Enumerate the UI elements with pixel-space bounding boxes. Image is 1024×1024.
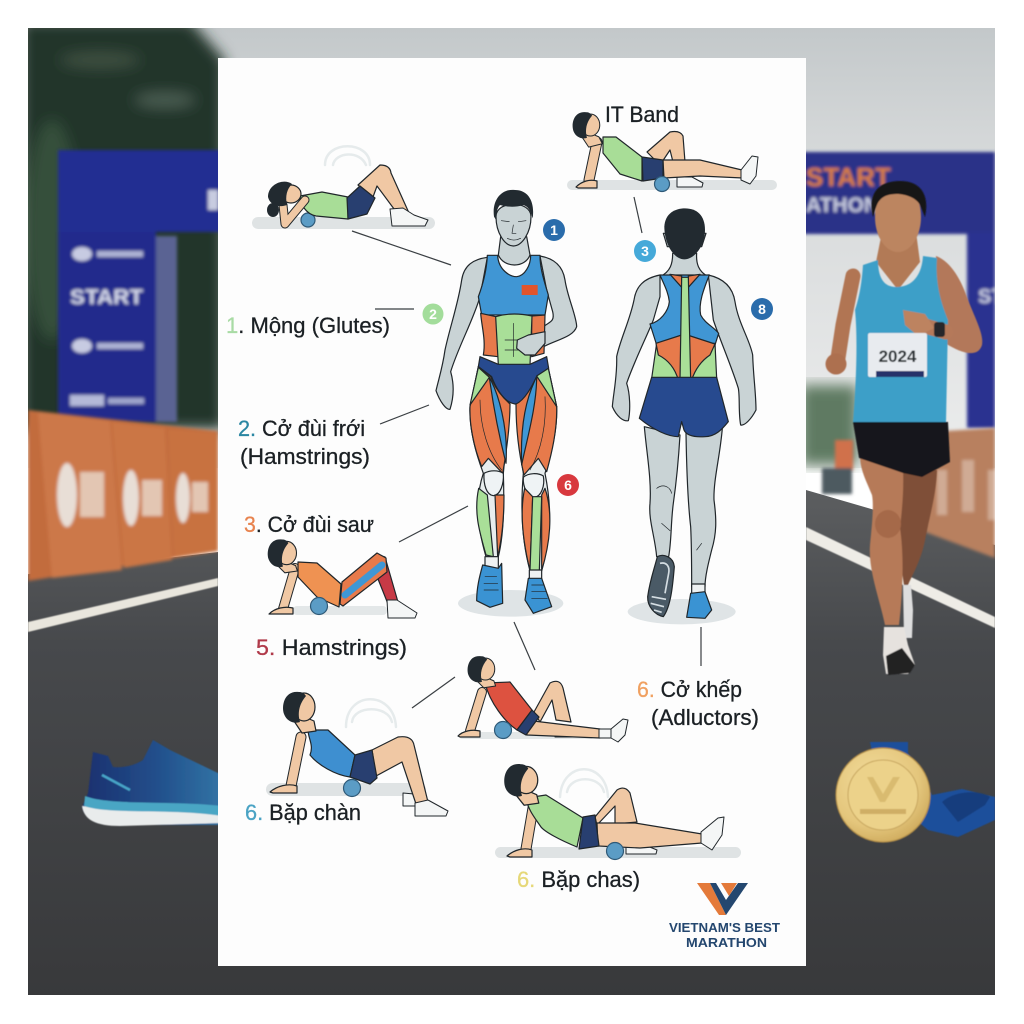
flat shoe <box>677 177 703 187</box>
back body figure <box>612 208 756 624</box>
green top <box>300 192 348 219</box>
right orange barrier <box>925 428 995 558</box>
medal disc <box>836 748 930 842</box>
shoe on road <box>82 740 222 826</box>
runner front leg <box>860 455 915 675</box>
blurred crowd <box>822 440 853 494</box>
badge 3 <box>634 240 656 262</box>
runner hand <box>903 310 946 337</box>
label: 6 adductors <box>637 677 759 730</box>
shoes <box>387 600 417 618</box>
right start arch: START <box>806 162 891 192</box>
leg base silhouettes <box>470 367 557 571</box>
exercise 6: green top leg extended <box>495 764 741 860</box>
left orange barrier <box>28 410 218 581</box>
roller <box>310 598 328 614</box>
logo text: MARATHON <box>686 936 767 950</box>
back muscles <box>652 274 717 380</box>
arm <box>269 568 295 614</box>
arm <box>576 142 597 188</box>
runner left arm <box>826 276 853 374</box>
left thigh <box>470 367 510 473</box>
exercise 3: hamstrings, orange top <box>268 539 417 618</box>
label: 2 Hamstrings: 2. Cở đùi frới <box>238 416 365 441</box>
bent leg <box>534 681 571 722</box>
label: 5 Hamstrings: 5. Hamstrings) <box>256 635 407 660</box>
neck and head <box>494 190 533 265</box>
arm <box>270 737 301 793</box>
briefs <box>478 357 549 404</box>
badge 3: 3 <box>641 243 649 259</box>
straight leg <box>525 720 600 738</box>
badge 8: 8 <box>758 301 766 317</box>
red shin <box>376 555 398 604</box>
motion arcs <box>325 146 370 165</box>
shorts <box>642 157 663 181</box>
blue top <box>308 730 355 777</box>
badge 6 <box>557 474 579 496</box>
label: 6 adductors: (Adluctors) <box>651 705 759 730</box>
label: 6 Bap chan: 6. Bặp chàn <box>245 800 361 825</box>
trees left <box>20 20 225 430</box>
runner back leg <box>898 470 937 638</box>
mat <box>293 606 387 615</box>
label: 2 Hamstrings <box>238 416 370 469</box>
straight leg <box>597 823 702 848</box>
label: 6 Bap chas: 6. Bặp chas) <box>517 867 640 892</box>
roller <box>344 780 360 796</box>
label: IT Band: IT Band <box>605 102 679 127</box>
mat <box>567 180 777 190</box>
back tank top <box>650 275 719 345</box>
trees right <box>800 385 858 465</box>
bent leg <box>647 132 685 165</box>
abdominal muscles <box>481 313 545 365</box>
hand on abdomen <box>517 332 545 355</box>
head <box>504 764 539 805</box>
ground shadow <box>458 590 563 617</box>
shorts <box>347 186 375 219</box>
flat shoe <box>626 842 657 854</box>
foot <box>701 817 724 850</box>
roller <box>606 842 624 860</box>
neck and head <box>660 208 708 277</box>
badge 2 <box>422 304 444 324</box>
medal and ribbon <box>836 742 995 842</box>
white panel <box>218 58 806 966</box>
straight leg <box>663 160 743 178</box>
mat <box>495 847 741 858</box>
logo text: VIETNAM'S BEST <box>669 921 780 935</box>
runner bib 2024: 2024 <box>879 347 917 366</box>
green top <box>603 137 642 181</box>
arm <box>458 692 482 737</box>
red top <box>485 682 532 730</box>
back shoes <box>648 555 712 618</box>
road <box>20 490 995 1000</box>
roller <box>654 176 670 192</box>
exercise 4: red top <box>458 656 628 742</box>
motion arcs <box>560 769 608 797</box>
mat <box>459 732 594 739</box>
shorts <box>350 750 377 784</box>
bent leg <box>595 788 637 825</box>
shorts <box>579 815 599 849</box>
runner shorts <box>853 422 950 477</box>
foot <box>611 719 628 742</box>
singlet <box>478 255 548 315</box>
bent leg <box>372 737 428 804</box>
left start arch: START <box>70 286 143 309</box>
flat shoe <box>555 732 576 737</box>
knees <box>484 471 544 497</box>
orange top <box>298 562 341 607</box>
shoes <box>390 208 428 226</box>
badge 8 <box>751 298 773 320</box>
head <box>468 656 496 688</box>
badge 1 <box>543 219 565 241</box>
arm behind head <box>283 200 305 224</box>
arms <box>612 275 756 425</box>
front shoes <box>477 557 552 613</box>
badge 2: 2 <box>429 306 437 322</box>
back shorts <box>639 377 728 437</box>
roller <box>301 213 315 227</box>
runner head and neck <box>872 181 926 290</box>
logo text <box>669 921 780 950</box>
coloured thigh <box>340 553 387 606</box>
leader lines <box>352 197 701 708</box>
head <box>573 112 602 147</box>
logo: Vietnam's Best Marathon <box>669 883 780 950</box>
right start arch <box>800 152 1004 428</box>
motion arcs <box>346 699 396 727</box>
runner <box>826 181 982 675</box>
roller <box>494 722 512 738</box>
left lower leg <box>477 488 504 557</box>
back shoe <box>403 793 418 806</box>
shoe <box>415 800 448 816</box>
left road marking <box>28 578 218 632</box>
right lower leg <box>522 488 550 571</box>
foot <box>741 156 758 184</box>
runner right shoulder and arm <box>934 256 982 353</box>
mat <box>252 217 435 229</box>
arm <box>507 808 533 857</box>
right start arch: ATHON <box>806 194 879 217</box>
left start arch <box>58 150 228 422</box>
head <box>283 692 316 733</box>
exercise 5: blue top <box>266 692 448 816</box>
label: 3 back thigh: 3. Cở đùi saư <box>244 512 374 537</box>
head and hair <box>267 182 301 217</box>
runner singlet <box>853 256 948 422</box>
runner bib 2024 <box>868 333 927 377</box>
exercise 2: IT band, green top <box>567 112 777 192</box>
ribbon <box>870 742 995 837</box>
right thigh <box>516 368 557 475</box>
green top <box>526 795 583 847</box>
arms <box>436 256 577 409</box>
front body figure with muscles <box>436 190 577 617</box>
bent leg <box>358 165 409 213</box>
sock <box>599 729 612 738</box>
label: 6 adductors: 6. Cở khếp <box>637 677 742 702</box>
right road marking <box>806 527 995 628</box>
right start arch: ST <box>978 286 1004 308</box>
mat <box>266 783 426 796</box>
badge 1: 1 <box>550 222 558 238</box>
ground shadow <box>628 599 736 624</box>
logo mark <box>697 883 748 915</box>
legs <box>644 427 722 587</box>
badge 6: 6 <box>564 477 572 493</box>
head <box>268 539 297 573</box>
sky <box>28 28 995 468</box>
exercise 1: lying glute roll, green top <box>252 146 435 229</box>
label: 1 Glutes: 1. Mộng (Glutes) <box>226 313 390 338</box>
label: 2 Hamstrings: (Hamstrings) <box>240 444 370 469</box>
shorts <box>517 710 539 735</box>
